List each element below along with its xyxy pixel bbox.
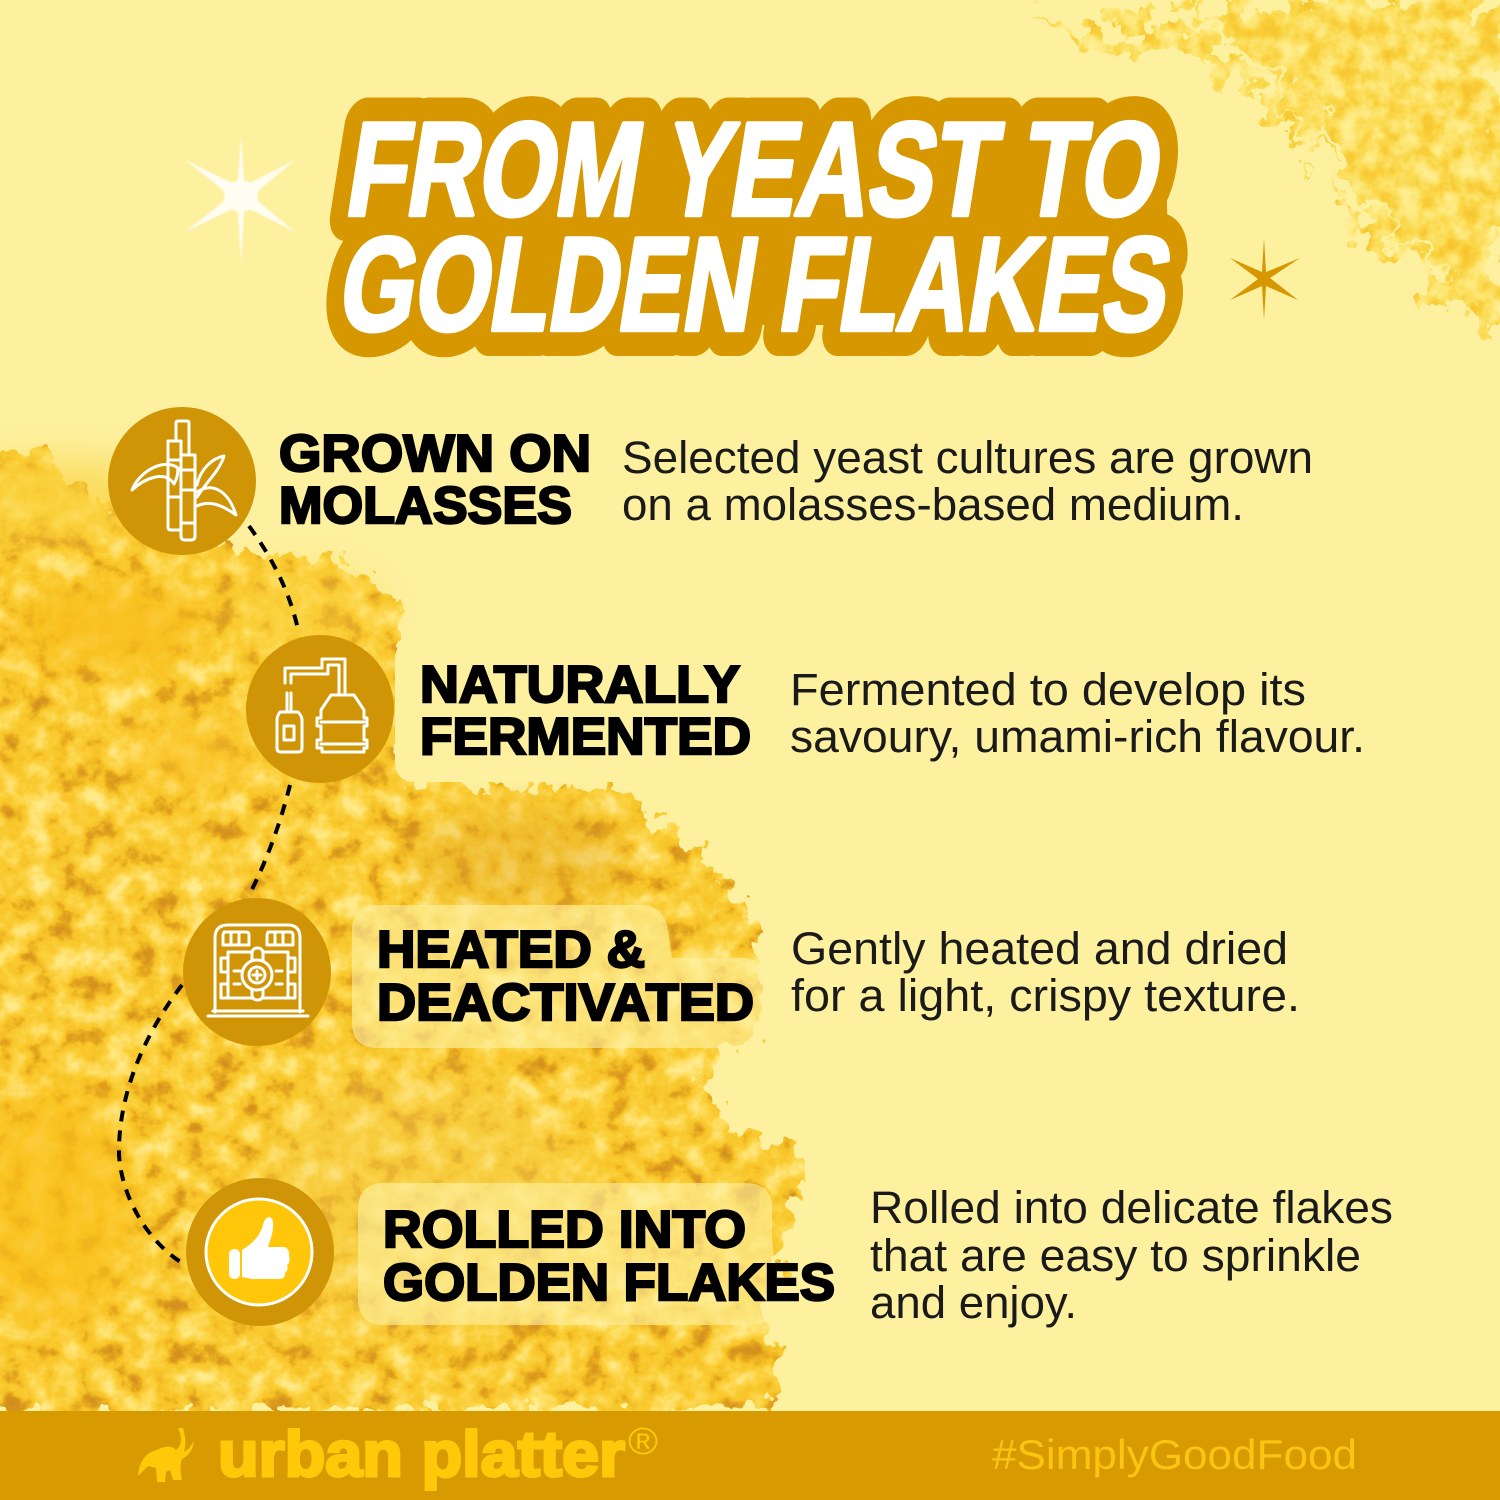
- description: rolled: that are easy to sprinkle: [870, 1230, 1361, 1281]
- heading: grown on molasses: GROWN ON: [279, 425, 591, 483]
- heading: grown on molasses: MOLASSES: [279, 477, 572, 535]
- dashed connector: step 1 to 2: [249, 526, 299, 634]
- heading: heated and deactivated: DEACTIVATED: [377, 974, 754, 1032]
- description: rolled: and enjoy.: [870, 1277, 1077, 1328]
- step 4: rolled into golden flakes: [186, 1178, 1393, 1328]
- description: fermented: savoury, umami-rich flavour.: [790, 711, 1365, 762]
- icon: sugar cane: [108, 407, 256, 555]
- title: [320, 96, 1210, 359]
- description: rolled: Rolled into delicate flakes: [870, 1182, 1393, 1233]
- heading chip: rolled into golden flakes: [358, 1183, 780, 1325]
- flake pile: main image: [0, 440, 805, 1411]
- heading: naturally fermented: NATURALLY: [420, 656, 740, 714]
- title backing shape: GOLDEN FLAKES: [331, 211, 1182, 359]
- description: heated: for a light, crispy texture.: [791, 970, 1300, 1021]
- description: molasses: on a molasses-based medium.: [622, 479, 1244, 530]
- heading: rolled into golden flakes: ROLLED INTO: [383, 1201, 746, 1259]
- title backing shape: [320, 96, 1210, 359]
- heading chip: naturally fermented: [395, 640, 772, 782]
- description: fermented: Fermented to develop its: [790, 664, 1306, 715]
- flake pile: top right: [1030, 0, 1500, 345]
- description: heated: Gently heated and dried: [791, 923, 1288, 974]
- icon: thumbs up: [186, 1178, 334, 1326]
- step 1: grown on molasses: [108, 407, 1313, 555]
- heading chip: heated and deactivated: [352, 905, 765, 1048]
- icon: heating chamber: [183, 898, 331, 1046]
- title text: FROM YEAST TO: [338, 96, 1173, 244]
- heading: naturally fermented: FERMENTED: [420, 708, 751, 766]
- logo wordmark: urban platter: [218, 1418, 625, 1490]
- registered mark: ®: [628, 1421, 658, 1463]
- hashtag: #SimplyGoodFood: [992, 1431, 1357, 1478]
- title text: GOLDEN FLAKES: [331, 211, 1182, 359]
- step 2: naturally fermented: [246, 635, 1365, 783]
- dashed connector: step 3 to 4: [119, 985, 187, 1266]
- footer band: [0, 1411, 1500, 1500]
- heading: heated and deactivated: HEATED &: [377, 921, 645, 979]
- step 3: heated and deactivated: [183, 898, 1300, 1046]
- icon: elephant logo: [138, 1428, 194, 1482]
- title backing shape: FROM YEAST TO: [338, 96, 1173, 244]
- sparkle: white star: [185, 135, 295, 262]
- dashed connector: step 2 to 3: [248, 785, 290, 897]
- description: molasses: Selected yeast cultures are grown: [622, 432, 1313, 483]
- sparkle: gold star: [1230, 238, 1300, 320]
- icon: fermentation still: [246, 635, 394, 783]
- heading: rolled into golden flakes: GOLDEN FLAKES: [383, 1254, 835, 1312]
